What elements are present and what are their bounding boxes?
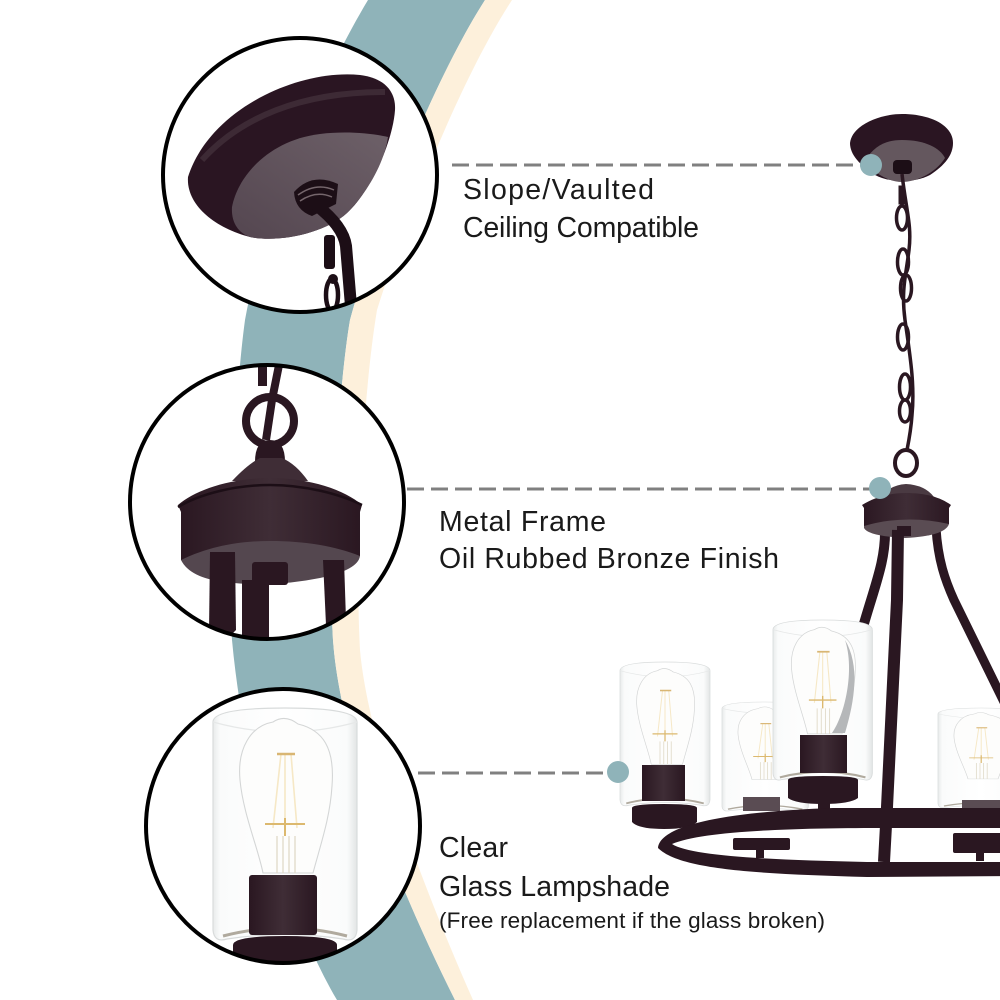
marker dot: canopy bbox=[860, 154, 882, 176]
arms behind lamps bbox=[863, 528, 1000, 702]
lamp: right bbox=[938, 708, 1000, 861]
text: sloped ceiling label: Slope/Vaulted bbox=[463, 174, 654, 206]
leader line: glass bbox=[418, 772, 610, 774]
text: glass lampshade label: Glass Lampshade bbox=[439, 871, 670, 903]
leader line: canopy bbox=[452, 164, 862, 166]
text: glass lampshade label: Clear bbox=[439, 832, 508, 864]
leader line: frame bbox=[407, 488, 870, 490]
center arm bbox=[884, 530, 898, 862]
background: teal curved band bbox=[231, 0, 485, 1000]
marker dot: glass bbox=[607, 761, 629, 783]
text: glass lampshade label bbox=[439, 832, 825, 933]
detail circle: glass lampshade bbox=[146, 689, 420, 970]
chain bbox=[895, 174, 917, 476]
text: sloped ceiling label bbox=[463, 174, 699, 244]
detail circle: ceiling canopy bbox=[163, 38, 437, 312]
lamp: center front bbox=[773, 620, 872, 810]
text: glass lampshade label: (Free replacement if the glass broken) bbox=[439, 908, 825, 933]
chandelier product illustration bbox=[620, 114, 1000, 877]
lamp: back bbox=[722, 702, 808, 858]
ceiling canopy bbox=[850, 114, 953, 182]
text: sloped ceiling label: Ceiling Compatible bbox=[463, 212, 699, 244]
detail circle: metal frame hub bbox=[130, 365, 404, 640]
lamp: left bbox=[620, 662, 710, 829]
wagon wheel ring bbox=[658, 808, 1000, 877]
hub bbox=[862, 484, 951, 538]
marker dot: frame bbox=[869, 477, 891, 499]
text: metal frame label: Oil Rubbed Bronze Finish bbox=[439, 543, 779, 575]
background: cream curved band bbox=[332, 0, 512, 1000]
text: metal frame label: Metal Frame bbox=[439, 506, 606, 538]
text: metal frame label bbox=[439, 506, 779, 575]
